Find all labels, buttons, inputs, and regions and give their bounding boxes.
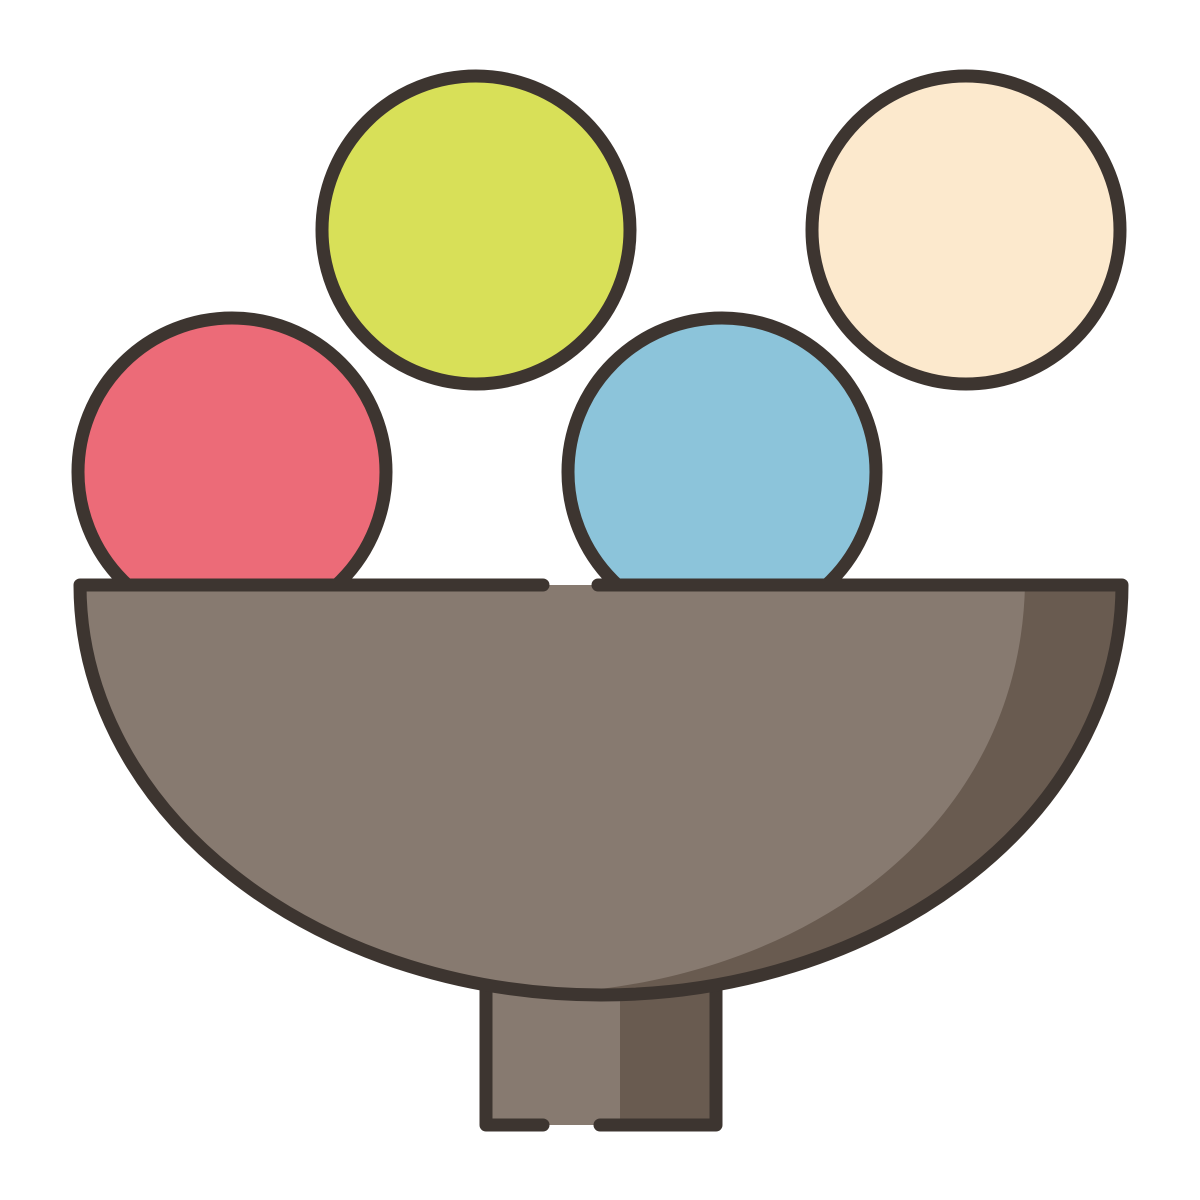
icon: cream ball (812, 76, 1120, 384)
icon: bowl (80, 585, 1122, 995)
icon: blue ball (568, 318, 876, 626)
icon: stem (486, 980, 716, 1125)
icon: green ball (322, 76, 630, 384)
icon: red ball (78, 318, 386, 626)
